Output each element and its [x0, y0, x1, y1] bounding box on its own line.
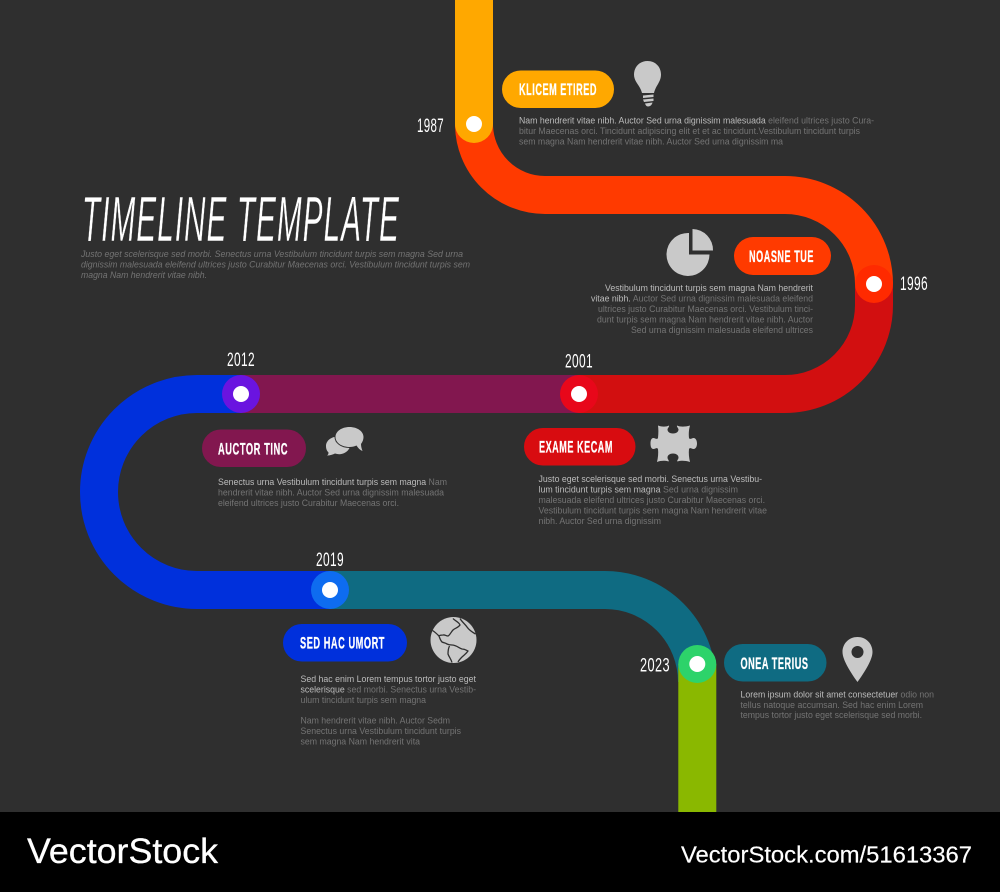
description 2023: tellus natoque accumsan. Sed hac enim Lorem — [740, 700, 923, 710]
description 1996 — [591, 283, 813, 335]
description 2019 — [300, 674, 476, 746]
title description: Justo eget scelerisque sed morbi. Senectus urna Vestibulum tincidunt turpis sem magna Sed urna — [80, 249, 463, 259]
marker 2023 — [678, 645, 716, 683]
icon: puzzle piece — [650, 426, 697, 462]
label pill: Noasne Tue — [734, 237, 831, 275]
footer bar — [0, 812, 1000, 892]
icon: speech bubbles — [326, 427, 364, 456]
description 2019: Senectus urna Vestibulum tincidunt turpis — [300, 726, 461, 736]
milestone 2001 — [524, 352, 767, 526]
marker 2012 — [222, 375, 260, 413]
description 2019: Nam hendrerit vitae nibh. Auctor Sedm — [300, 716, 450, 726]
year 2012: 2012 — [227, 350, 255, 371]
description 2023: tempus tortor justo eget scelerisque sed morbi. — [740, 710, 922, 720]
description 1987: Nam hendrerit vitae nibh. Auctor Sed urna dignissim malesuada eleifend ultrices justo Cura- — [519, 116, 874, 126]
milestone 2012 — [202, 350, 447, 508]
title description — [80, 249, 470, 280]
description 2019: sem magna Nam hendrerit vita — [300, 736, 420, 746]
description 1996: ultrices justo Curabitur Maecenas orci. Vestibulum tinci- — [598, 304, 813, 314]
year 2023: 2023 — [640, 656, 670, 676]
marker 2019 — [311, 571, 349, 609]
label pill: Klicem Etired — [502, 70, 614, 108]
milestone 2019 — [283, 550, 476, 746]
description 2001: nibh. Auctor Sed urna dignissim — [538, 516, 661, 526]
description 2019: scelerisque sed morbi. Senectus urna Vestib- — [300, 684, 476, 694]
description 2019: Sed hac enim Lorem tempus tortor justo eget — [300, 674, 476, 684]
description 2001 — [538, 474, 767, 526]
title block: TIMELINE TEMPLATE — [82, 183, 400, 255]
milestone 1996 — [591, 229, 928, 335]
footer logo: VectorStock — [27, 832, 219, 871]
description 2019: ulum tincidunt turpis sem magna — [300, 695, 426, 705]
year 2019: 2019 — [316, 550, 344, 571]
description 1987: bitur Maecenas orci. Tincidunt adipiscing elit et et ac tincidunt.Vestibulum tincidunt turpis — [519, 126, 860, 136]
milestone 1987 — [417, 61, 874, 146]
label pill: Auctor Tinc — [202, 430, 306, 467]
description 1996: vitae nibh. Auctor Sed urna dignissim malesuada eleifend — [591, 294, 813, 304]
description 2012: Senectus urna Vestibulum tincidunt turpis sem magna Nam — [218, 477, 447, 487]
label pill: Auctor Tinc: AUCTOR TINC — [218, 440, 288, 458]
year 1987: 1987 — [417, 116, 444, 137]
label pill: Exame Kecam — [524, 428, 636, 466]
description 1996: Sed urna dignissim malesuada eleifend ultrices — [631, 325, 813, 335]
description 2012: eleifend ultrices justo Curabitur Maecenas orci. — [218, 498, 399, 508]
description 2001: Vestibulum tincidunt turpis sem magna Nam hendrerit vitae — [538, 506, 767, 516]
icon: light bulb — [634, 61, 661, 106]
marker 2001 — [560, 375, 598, 413]
marker 1996 — [855, 265, 893, 303]
description 2023 — [740, 690, 934, 720]
label pill: Onea Terius: ONEA TERIUS — [740, 654, 808, 673]
label pill: Sed Hac Umort — [283, 624, 407, 662]
milestone 2023 — [640, 637, 934, 720]
description 2001: malesuada eleifend ultrices justo Curabitur Maecenas orci. — [538, 495, 765, 505]
description 1996: Vestibulum tincidunt turpis sem magna Nam hendrerit — [605, 283, 813, 293]
label pill: Onea Terius — [724, 644, 826, 682]
label pill: Klicem Etired: KLICEM ETIRED — [519, 80, 597, 99]
label pill: Sed Hac Umort: SED HAC UMORT — [300, 634, 385, 652]
description 2001: Justo eget scelerisque sed morbi. Senectus urna Vestibu- — [538, 474, 762, 484]
icon: globe — [430, 617, 476, 663]
description 1987 — [519, 116, 874, 146]
title description: dignissim malesuada eleifend ultrices justo Curabitur Maecenas orci. Vestibulum tincidunt turpis sem — [81, 260, 470, 270]
title block — [80, 183, 470, 280]
description 1996: dunt turpis sem magna Nam hendrerit vitae nibh. Auctor — [597, 314, 813, 324]
timeline road — [99, 0, 874, 812]
year 2001: 2001 — [565, 352, 593, 372]
label pill: Noasne Tue: NOASNE TUE — [749, 247, 814, 266]
description 2012 — [218, 477, 447, 508]
footer url: VectorStock.com/51613367 — [681, 842, 972, 868]
label pill: Exame Kecam: EXAME KECAM — [539, 438, 613, 456]
icon: pie chart — [666, 229, 713, 276]
year 1996: 1996 — [900, 274, 928, 295]
icon: map pin — [842, 637, 872, 682]
marker 1987 — [455, 105, 493, 143]
description 2023: Lorem ipsum dolor sit amet consectetuer odio non — [740, 690, 934, 700]
description 2001: lum tincidunt turpis sem magna Sed urna dignissim — [538, 484, 738, 494]
description 1987: sem magna Nam hendrerit vitae nibh. Auctor Sed urna dignissim ma — [519, 136, 783, 146]
description 2012: hendrerit vitae nibh. Auctor Sed urna dignissim malesuada — [218, 488, 444, 498]
title description: magna Nam hendrerit vitae nibh. — [81, 270, 207, 280]
